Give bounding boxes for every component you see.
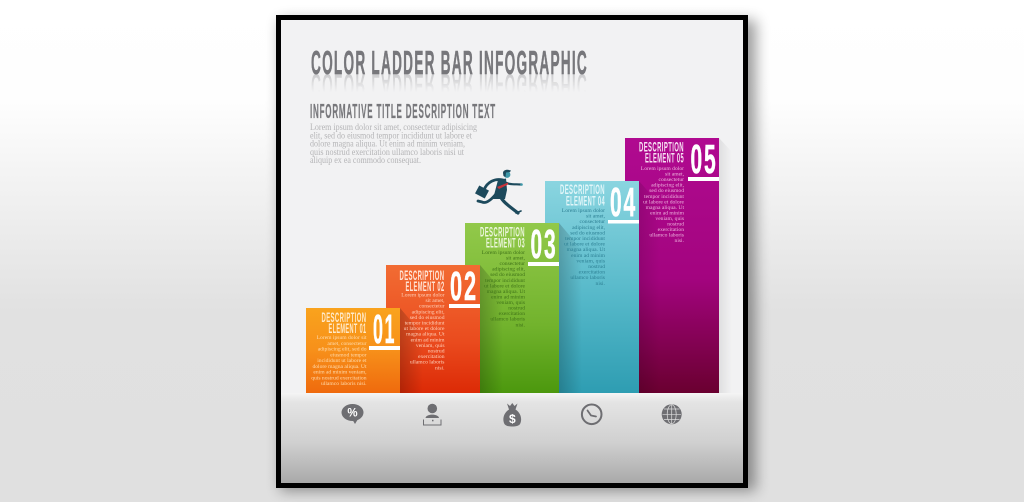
bar 05 body text: consectetur — [659, 177, 684, 183]
bar 04 cast shadow — [639, 181, 660, 393]
bar 05: ELEMENT 05 — [645, 150, 684, 166]
bar 01 body text: incididunt ut labore et — [317, 358, 367, 364]
framed poster: COLOR LADDER BAR INFOGRAPHIC — [311, 44, 588, 81]
bar 05 number: 05 — [690, 136, 718, 182]
intro paragraph: aliquip ex ea commodo consequat. — [310, 155, 421, 165]
bar 05 — [625, 136, 719, 393]
bar 01 body text: enim ad minim veniam, — [313, 370, 367, 376]
bar 02 body text: consectetur — [419, 304, 445, 310]
icon: money bag: $ — [509, 412, 516, 426]
frame shadow — [280, 20, 756, 491]
bar 02 body text: magna aliqua. Ut — [406, 332, 445, 338]
bar 02 body text: ut labore et dolore — [404, 326, 445, 332]
bar 04 body text: magna aliqua. Ut — [567, 247, 605, 253]
intro paragraph — [310, 122, 477, 165]
bar 05 heading — [639, 139, 684, 166]
bar 02: ELEMENT 02 — [406, 278, 444, 294]
bar 05 body text: adipiscing elit, — [651, 183, 685, 189]
icon: percent speech bubble: % — [347, 408, 358, 420]
bar 01 cast shadow — [400, 308, 423, 393]
title — [311, 50, 586, 88]
bar 03 body text: exercitation — [499, 311, 525, 317]
bar 02 body text: sit amet, — [426, 298, 445, 304]
bar 05 body text: veniam, quis — [655, 216, 684, 222]
bar 01 face — [306, 308, 400, 393]
bar 02 body text: enim ad minim — [411, 337, 445, 343]
bar 01 body text: eiusmod tempor — [330, 352, 367, 358]
bar 04 body text: adipiscing elit, — [572, 225, 606, 231]
bar 05 body text: sed do eiusmod — [649, 188, 684, 194]
bar 01 — [306, 306, 400, 393]
bar 04 body text: exercitation — [579, 270, 605, 276]
icon: money bag — [503, 403, 521, 426]
bar 02 heading — [400, 267, 444, 294]
bar 02 — [386, 263, 480, 393]
bar 02 number: 02 — [450, 263, 478, 309]
bar 02: DESCRIPTION — [400, 267, 444, 283]
bar 03: ELEMENT 03 — [486, 235, 525, 251]
bar 05 body text: nisi. — [675, 238, 685, 244]
bar 05 body text: magna aliqua. Ut — [646, 205, 684, 211]
bar 02 body text: nisi. — [435, 365, 445, 371]
bar 03 body text: veniam, quis — [496, 300, 525, 306]
bar 02 body text: ullamco laboris — [410, 360, 444, 366]
bar 03 body text: ullamco laboris — [490, 317, 525, 323]
bar 05 body text: exercitation — [658, 227, 684, 233]
bar 03 face — [465, 223, 559, 393]
bar 04 body text: consectetur — [580, 219, 605, 225]
bar 01 body text: Lorem ipsum dolor sit — [317, 335, 367, 341]
bar 03 body text: adipiscing elit, — [492, 267, 526, 273]
bar 04 body text: tempor incididunt — [565, 236, 605, 242]
bar 03 body text: sit amet, — [506, 256, 526, 262]
bar 04 heading — [560, 181, 605, 208]
bar 03 body text: nostrud — [508, 306, 525, 312]
bar 03 body text: magna aliqua. Ut — [487, 289, 525, 295]
bar 05 body text: ullamco laboris — [649, 233, 684, 239]
icon: person at laptop — [423, 404, 442, 426]
icon: globe — [662, 404, 682, 424]
bar 03 underline — [528, 262, 559, 266]
bar 05 body text: enim ad minim — [650, 210, 685, 216]
bar 03 body text: consectetur — [500, 261, 525, 267]
bar 03 body text: ut labore et dolore — [484, 283, 526, 289]
bar 01: ELEMENT 01 — [328, 320, 366, 336]
bar 02 body text: sed do eiusmod — [410, 315, 445, 321]
bar 03 heading — [480, 224, 525, 251]
bar 02 body text: exercitation — [418, 354, 445, 360]
bar 01 body text: ullamco laboris nisi. — [321, 381, 367, 387]
bar 05 body text: ut labore et dolore — [643, 199, 685, 205]
intro paragraph: elit, sed do eiusmod tempor incididunt ut labore et — [310, 130, 472, 140]
bar 03 cast shadow — [559, 223, 582, 393]
framed poster — [278, 18, 746, 486]
bar 04 body text: ut labore et dolore — [564, 242, 606, 248]
bar 01 body text: quis nostrud exercitation — [311, 375, 367, 381]
bar 05 underline — [688, 177, 719, 181]
bar 04: ELEMENT 04 — [566, 192, 605, 208]
bar 04 body text: nisi. — [596, 281, 606, 287]
bar 03 body text: enim ad minim — [491, 294, 526, 300]
bar 04 body text: sit amet, — [586, 214, 606, 220]
poster frame — [278, 18, 746, 486]
bar 04 number: 04 — [610, 179, 637, 225]
bottom band — [281, 393, 743, 483]
framed poster: INFORMATIVE TITLE DESCRIPTION TEXT — [310, 100, 496, 123]
bar 03 body text: sed do eiusmod — [490, 272, 525, 278]
intro paragraph: Lorem ipsum dolor sit amet, consectetur adipisicing — [310, 122, 477, 132]
bar 04 body text: enim ad minim — [571, 253, 606, 259]
bar 02 body text: tempor incididunt — [405, 320, 445, 326]
bar 03: DESCRIPTION — [480, 224, 525, 240]
bar 01 body text: amet, consectetur — [327, 341, 367, 347]
bar 05 body text: Lorem ipsum dolor — [641, 166, 684, 172]
bar 03 — [465, 221, 559, 393]
bar 01: 01 — [373, 306, 396, 352]
bar 05 body text: tempor incididunt — [644, 194, 684, 200]
bar 04 body text: sed do eiusmod — [570, 230, 605, 236]
bar 05 body text: nostrud — [667, 222, 684, 228]
bar 04: DESCRIPTION — [560, 181, 605, 197]
bar 01 body text: adipiscing elit, sed do — [318, 346, 367, 352]
bar 02 underline — [449, 304, 480, 308]
bar 02 cast shadow — [480, 265, 503, 393]
bar 05 face — [625, 138, 719, 393]
bar 05 body text: sit amet, — [665, 172, 685, 178]
bar 04 body text: veniam, quis — [576, 258, 605, 264]
bar 01 heading — [322, 309, 366, 336]
bar 03 body text: Lorem ipsum dolor — [482, 250, 525, 256]
bar 02 body text: nostrud — [428, 348, 445, 354]
intro paragraph: dolore magna aliqua. Ut enim ad minim veniam, — [310, 138, 465, 148]
bar 01 body text: dolore magna aliqua. Ut — [312, 364, 367, 370]
icon: clock — [582, 404, 602, 424]
bar 01 underline — [369, 346, 400, 350]
bar 03 body text: tempor incididunt — [485, 278, 525, 284]
bar 05 shadow on poster — [719, 138, 732, 393]
bar 02 body text: adipiscing elit, — [412, 309, 445, 315]
bar 04 underline — [608, 220, 639, 224]
framed poster: COLOR LADDER BAR INFOGRAPHIC — [311, 67, 588, 104]
bar 04 body text: nostrud — [588, 264, 605, 270]
bar 03 number: 03 — [530, 221, 558, 267]
bar 02 body text: veniam, quis — [416, 343, 444, 349]
icon: running businessman — [475, 170, 523, 213]
bar 02 face — [386, 265, 480, 393]
bar 02 body text: Lorem ipsum dolor — [401, 292, 445, 298]
intro paragraph: quis nostrud exercitation ullamco laboris nisi ut — [310, 147, 464, 157]
bar 03 body text: nisi. — [516, 322, 526, 328]
bar 04 body text: ullamco laboris — [570, 275, 605, 281]
bar 05: DESCRIPTION — [639, 139, 684, 155]
bar 04 — [545, 179, 639, 393]
bar 01: DESCRIPTION — [322, 309, 366, 325]
icon: percent speech bubble — [342, 404, 364, 424]
bar 04 body text: Lorem ipsum dolor — [562, 208, 605, 214]
bar 04 face — [545, 181, 639, 393]
